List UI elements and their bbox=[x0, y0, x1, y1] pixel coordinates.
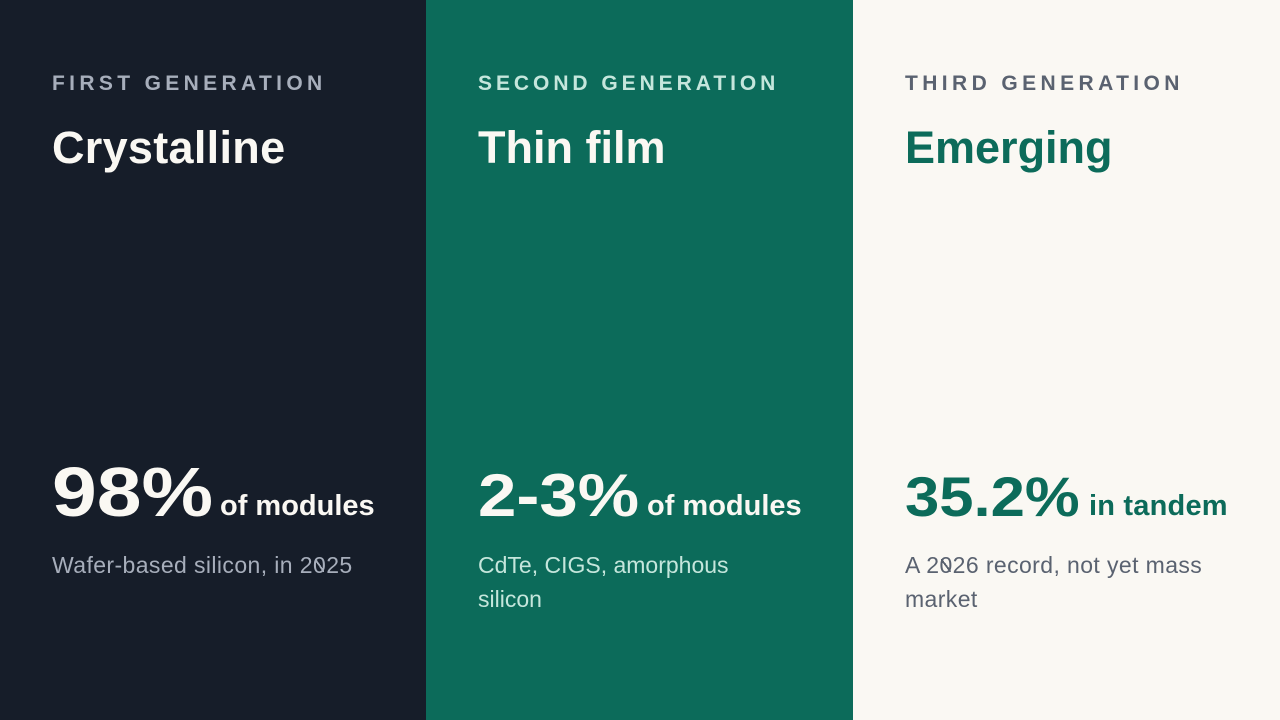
panel: first generation bbox=[0, 0, 426, 720]
panel: second generation bbox=[426, 0, 853, 720]
eyebrow: second generation: SECOND GENERATION bbox=[478, 72, 779, 95]
eyebrow: third generation: THIRD GENERATION bbox=[905, 72, 1184, 95]
stat: 98%: 98% bbox=[52, 453, 213, 531]
description: wafer-based silicon: Wafer-based silicon, in 2025 bbox=[52, 552, 353, 578]
eyebrow: first generation: FIRST GENERATION bbox=[52, 72, 327, 95]
panel: third generation bbox=[853, 0, 1280, 720]
stat unit: of modules: of modules bbox=[220, 490, 375, 522]
stat: 35.2%: 35.2% bbox=[905, 465, 1080, 528]
description: CdTe, CIGS, amorphous silicon bbox=[478, 552, 729, 612]
description: CdTe, CIGS, amorphous silicon: silicon bbox=[478, 586, 542, 612]
heading: crystalline: Crystalline bbox=[52, 122, 285, 173]
description: CdTe, CIGS, amorphous silicon: CdTe, CIGS, amorphous bbox=[478, 552, 729, 578]
stat unit: in tandem: in tandem bbox=[1089, 490, 1228, 522]
description: 2026 record: A 2026 record, not yet mass market bbox=[905, 552, 1202, 612]
stat: 2-3%: 2-3% bbox=[478, 462, 639, 529]
stat unit: of modules: of modules bbox=[647, 490, 802, 522]
heading: thin film: Thin film bbox=[478, 122, 665, 173]
heading: emerging: Emerging bbox=[905, 122, 1113, 173]
